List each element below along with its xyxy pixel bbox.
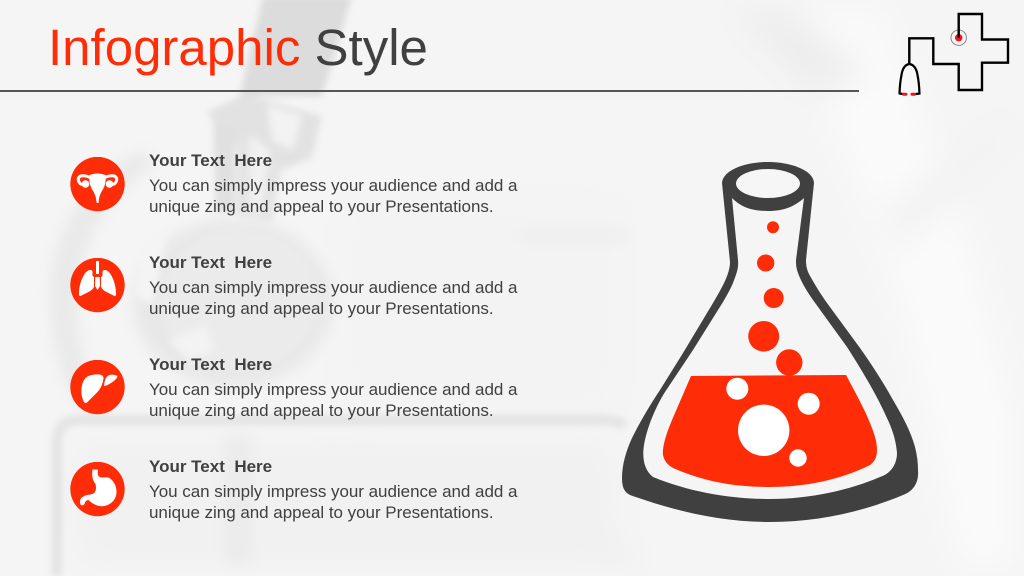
logo: stethoscope and medical cross (898, 12, 1010, 96)
text block 2 (149, 253, 518, 318)
text block 2: unique zing and appeal to your Presentations. (149, 299, 494, 318)
title: Infographic Style (48, 19, 428, 76)
text block 2: Your Text Here (149, 253, 272, 272)
text block 3: You can simply impress your audience and add a (149, 380, 517, 399)
icon: stomach (70, 462, 125, 516)
text block 3: Your Text Here (149, 355, 272, 374)
icon: lungs (70, 258, 125, 312)
icon: liver (70, 360, 125, 414)
text block 4: unique zing and appeal to your Presentations. (149, 503, 494, 522)
rising bubbles (748, 221, 802, 376)
icon: uterus (70, 157, 125, 212)
text block 1: Your Text Here (149, 151, 272, 170)
header divider line (0, 90, 859, 92)
tube (240, 0, 352, 96)
text block 3: unique zing and appeal to your Presentations. (149, 401, 494, 420)
bubbles in liquid (726, 378, 820, 467)
text block 1: You can simply impress your audience and add a (149, 176, 517, 195)
flask illustration (622, 162, 918, 522)
text block 1: unique zing and appeal to your Presentations. (149, 197, 494, 216)
flask glass outline (622, 162, 918, 522)
text block 2: You can simply impress your audience and add a (149, 278, 517, 297)
liquid (663, 375, 877, 487)
text block 4: Your Text Here (149, 457, 272, 476)
text block 3 (149, 355, 518, 420)
flask mouth opening (736, 169, 800, 198)
text block 4 (149, 457, 518, 522)
text block 1 (149, 151, 518, 216)
text block 4: You can simply impress your audience and add a (149, 482, 517, 501)
